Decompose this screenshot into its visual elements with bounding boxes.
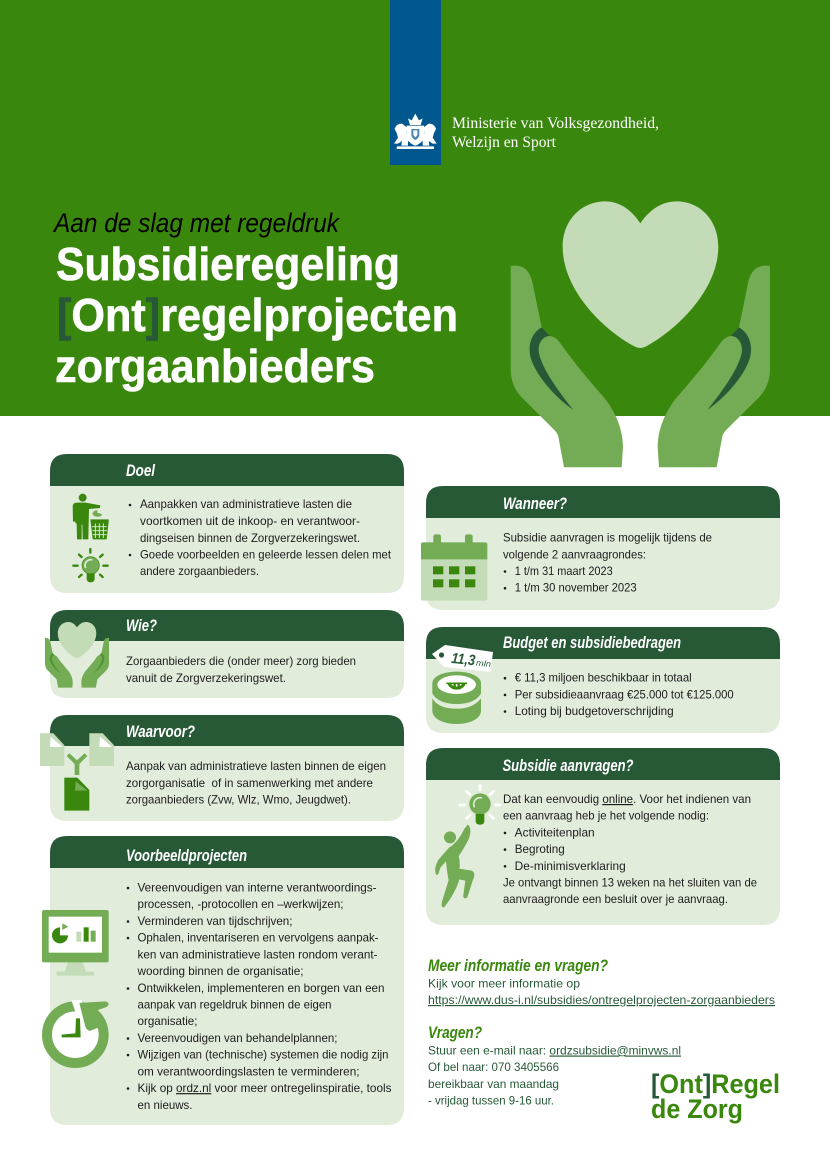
- ministry name: Ministerie van Volksgezondheid,: [452, 115, 659, 132]
- ministry name: [452, 115, 659, 151]
- text: Voorbeeldprojecten bullets: ken van administratieve lasten rondom verant-: [138, 947, 378, 961]
- text: Wanneer: [503, 531, 712, 595]
- contact: vragen: [428, 1024, 681, 1108]
- text: Subsidie aanvragen: De-minimisverklaring: [515, 859, 626, 873]
- text: Subsidie aanvragen: [503, 792, 757, 906]
- text: Subsidie aanvragen: een aanvraag heb je het volgende nodig:: [503, 809, 709, 823]
- header banner: [0, 0, 830, 416]
- text: website link: [428, 976, 775, 1007]
- main title: zorgaanbieders: [55, 340, 375, 392]
- main title: [Ont]regelprojecten: [57, 289, 458, 341]
- text: Voorbeeldprojecten bullets: organisatie;: [138, 1014, 198, 1028]
- text: Doel bullets: andere zorgaanbieders.: [140, 564, 259, 578]
- text: Subsidie aanvragen: Begroting: [515, 842, 565, 856]
- text: Wanneer: 1 t/m 31 maart 2023: [515, 564, 613, 578]
- text: Doel bullets: Goede voorbeelden en geleerde lessen delen met: [140, 548, 392, 562]
- text: website link: Kijk voor meer informatie op: [428, 976, 580, 990]
- icon: price tag 11,3 mln: 11,3: [450, 650, 477, 669]
- icon: light bulb: [73, 549, 108, 582]
- text: website link: https://www.dus-i.nl/subsidies/ontregelprojecten-zorgaanbieders: [428, 993, 775, 1007]
- text: Voorbeeldprojecten bullets: woording binnen de organisatie;: [137, 964, 304, 978]
- text: Subsidie aanvragen: Je ontvangt binnen 13 weken na het sluiten van de: [503, 876, 757, 890]
- panel: Doel: [50, 454, 404, 593]
- icon: person using trash bin: [73, 494, 109, 539]
- heading: Waarvoor: Waarvoor?: [126, 723, 195, 741]
- heading: Voorbeeldprojecten: Voorbeeldprojecten: [126, 847, 247, 865]
- panel: Voorbeeldprojecten: [42, 836, 404, 1125]
- text: contact details: bereikbaar van maandag: [428, 1077, 559, 1091]
- contact: meer informatie: [428, 957, 775, 1007]
- panel: Subsidie aanvragen: [426, 748, 780, 925]
- text: contact details: - vrijdag tussen 9-16 uur.: [428, 1094, 554, 1108]
- heading: Wie: Wie?: [126, 617, 157, 635]
- heading: Wanneer: Wanneer?: [503, 495, 567, 513]
- icon: documents merging: [40, 733, 114, 811]
- icon: hands holding heart small: [45, 622, 109, 688]
- text: Budget bullets: Loting bij budgetoverschrijding: [515, 704, 674, 718]
- text: Voorbeeldprojecten bullets: Ontwikkelen, implementeren en borgen van een: [138, 981, 384, 995]
- icon: stack of euro coins: [432, 672, 481, 724]
- ministry name: Welzijn en Sport: [452, 134, 557, 151]
- ministry logo ribbon: [390, 0, 659, 165]
- text: Voorbeeldprojecten bullets: Wijzigen van (technische) systemen die nodig zijn: [138, 1048, 388, 1062]
- text: Wie: [126, 654, 356, 685]
- panel: Wie: [45, 610, 404, 698]
- text: Voorbeeldprojecten bullets: en nieuws.: [138, 1098, 192, 1112]
- subtitle: Aan de slag met regeldruk: [52, 208, 341, 238]
- text: Wanneer: Subsidie aanvragen is mogelijk tijdens de: [503, 531, 712, 545]
- text: Subsidie aanvragen: aanvraagronde een besluit over je aanvraag.: [503, 892, 728, 906]
- heading: Doel: Doel: [126, 462, 155, 480]
- text: Voorbeeldprojecten bullets: aanpak van regeldruk binnen de eigen: [138, 998, 332, 1012]
- text: contact details: [428, 1044, 681, 1108]
- text: Budget bullets: Per subsidieaanvraag €25.000 tot €125.000: [515, 687, 734, 701]
- text: Doel bullets: [129, 497, 392, 578]
- text: Subsidie aanvragen: Dat kan eenvoudig online. Voor het indienen van: [503, 792, 751, 806]
- text: contact details: Of bel naar: 070 3405566: [428, 1060, 559, 1074]
- icon: calendar: [421, 534, 487, 601]
- text: Wanneer: 1 t/m 30 november 2023: [515, 581, 637, 595]
- title block: [52, 208, 458, 392]
- text: Voorbeeldprojecten bullets: processen, -protocollen en –werkwijzen;: [138, 897, 344, 911]
- main title: Subsidieregeling: [56, 238, 400, 290]
- icon: royal coat of arms: [394, 114, 437, 149]
- heading: Vragen: Vragen?: [428, 1024, 482, 1042]
- text: Budget bullets: [504, 671, 734, 718]
- icon: monitor with charts: [42, 910, 109, 976]
- text: Doel bullets: dingseisen binnen de Zorgverzekeringswet.: [140, 531, 360, 545]
- text: Waarvoor: Aanpak van administratieve lasten binnen de eigen: [126, 759, 386, 773]
- heading: Meer informatie: Meer informatie en vragen?: [428, 957, 608, 975]
- text: Doel bullets: Aanpakken van administratieve lasten die: [140, 497, 352, 511]
- panel: Waarvoor: [40, 715, 404, 821]
- icon: price tag 11,3 mln: [432, 645, 493, 672]
- text: Voorbeeldprojecten bullets: [127, 880, 392, 1112]
- panel: Wanneer: [421, 486, 780, 610]
- text: Wanneer: volgende 2 aanvraagrondes:: [503, 547, 646, 561]
- logo: [Ont]Regel de Zorg: [651, 1069, 780, 1124]
- text: Waarvoor: zorgaanbieders (Zvw, Wlz, Wmo, Jeugdwet).: [126, 792, 351, 806]
- heading: Subsidie aanvragen: Subsidie aanvragen?: [502, 757, 634, 775]
- text: contact details: Stuur een e-mail naar: ordzsubsidie@minvws.nl: [428, 1044, 681, 1058]
- text: Doel bullets: voortkomen uit de inkoop- en verantwoor-: [140, 514, 360, 528]
- text: Voorbeeldprojecten bullets: om verantwoordingslasten te verminderen;: [138, 1064, 360, 1078]
- icon: price tag 11,3 mln: mln: [476, 658, 492, 669]
- text: Subsidie aanvragen: Activiteitenplan: [515, 825, 595, 839]
- text: Wie: Zorgaanbieders die (onder meer) zorg bieden: [126, 654, 356, 668]
- text: Voorbeeldprojecten bullets: Kijk op ordz.nl voor meer ontregelinspiratie, tools: [138, 1081, 392, 1095]
- logo: [Ont]Regel de Zorg: [Ont]Regel: [651, 1069, 780, 1099]
- text: Voorbeeldprojecten bullets: Ophalen, inventariseren en vervolgens aanpak-: [138, 931, 379, 945]
- text: Voorbeeldprojecten bullets: Verminderen van tijdschrijven;: [138, 914, 292, 928]
- text: Waarvoor: zorgorganisatie of in samenwerking met andere: [126, 776, 373, 790]
- icon: person reaching for light bulb: [435, 785, 500, 907]
- heading: Budget: Budget en subsidiebedragen: [503, 634, 681, 652]
- icon: clock with return arrow: [47, 1000, 109, 1063]
- text: Voorbeeldprojecten bullets: Vereenvoudigen van behandelplannen;: [138, 1031, 338, 1045]
- logo: [Ont]Regel de Zorg: de Zorg: [651, 1094, 743, 1124]
- main title: [55, 238, 458, 392]
- panel: Budget en subsidiebedragen: [426, 627, 780, 733]
- text: Wie: vanuit de Zorgverzekeringswet.: [126, 671, 286, 685]
- text: Waarvoor: [126, 759, 386, 806]
- icon: hands holding heart: [511, 201, 770, 467]
- text: Voorbeeldprojecten bullets: Vereenvoudigen van interne verantwoordings-: [138, 880, 377, 894]
- text: Budget bullets: € 11,3 miljoen beschikbaar in totaal: [515, 671, 692, 685]
